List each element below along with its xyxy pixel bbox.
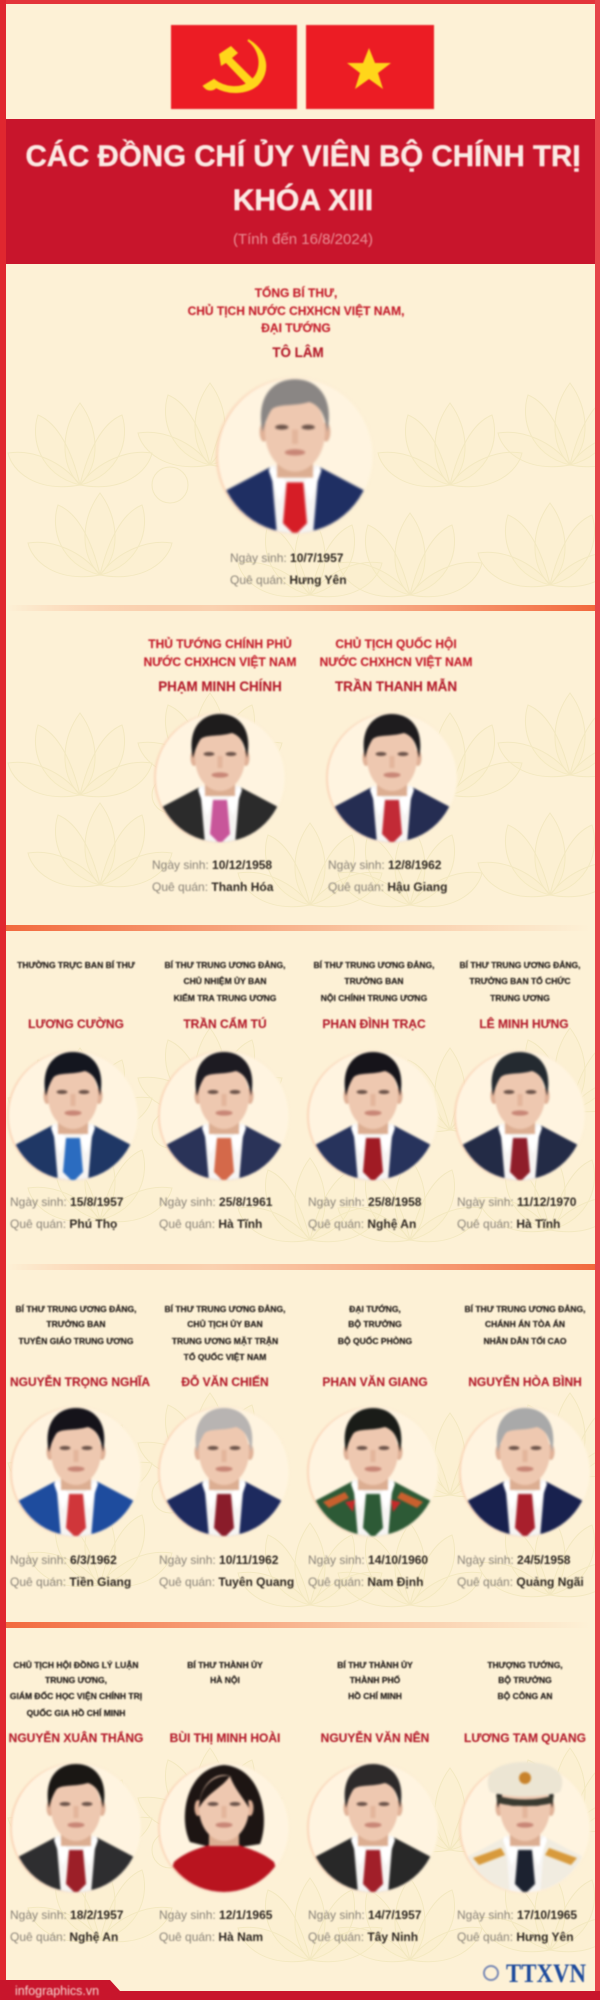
person: Lương Tam Quang: THƯỢNG TƯỚNG, [487,1659,563,1670]
person: Phan Đình Trạc: NỘI CHÍNH TRUNG ƯƠNG [321,992,428,1003]
person: Tô Lâm: TỔNG BÍ THƯ, [255,285,337,300]
person: Phạm Minh Chính: Quê quán: Thanh Hóa [152,880,274,894]
person: Lương Tam Quang: BỘ TRƯỞNG [498,1674,552,1685]
person: Đỗ Văn Chiến: TRUNG ƯƠNG MẶT TRẬN [172,1335,278,1346]
person: Bùi Thị Minh Hoài: HÀ NỘI [210,1674,240,1685]
person: Lê Minh Hưng: Ngày sinh: 11/12/1970 [457,1195,577,1209]
person: Trần Thanh Mẫn: TRẦN THANH MẪN [335,679,457,694]
person: Nguyễn Xuân Thắng: Ngày sinh: 18/2/1957 [10,1908,124,1922]
person: Nguyễn Hòa Bình: NGUYỄN HÒA BÌNH [468,1374,582,1389]
person: Phan Văn Giang: Quê quán: Nam Định [308,1575,423,1589]
person: Lê Minh Hưng: BÍ THƯ TRUNG ƯƠNG ĐẢNG, [460,959,580,970]
person: Phan Văn Giang: Ngày sinh: 14/10/1960 [308,1553,428,1567]
person: Lê Minh Hưng: TRUNG ƯƠNG [490,993,550,1003]
person: Tô Lâm: ĐẠI TƯỚNG [261,320,331,335]
left frame border [0,0,6,2000]
person: Lương Tam Quang: Ngày sinh: 17/10/1965 [457,1908,577,1922]
logo: TTXVN: TTXVN [506,1959,586,1988]
person: Bùi Thị Minh Hoài: BÙI THỊ MINH HOÀI [170,1730,280,1745]
person: Phan Văn Giang: BỘ QUỐC PHÒNG [338,1335,412,1346]
person: Nguyễn Văn Nên [308,1659,438,1944]
divider 1 [6,605,596,611]
person: Lương Cường [8,959,138,1231]
person: Nguyễn Văn Nên: THÀNH PHỐ [350,1674,401,1685]
title band [0,119,600,264]
lotus pattern section 3 [8,1028,600,1242]
person: Phan Văn Giang: PHAN VĂN GIANG [322,1374,428,1389]
person: Trần Thanh Mẫn: Ngày sinh: 12/8/1962 [328,858,442,872]
person: Lê Minh Hưng: LÊ MINH HƯNG [479,1016,569,1031]
person: Phan Đình Trạc: PHAN ĐÌNH TRẠC [322,1016,426,1031]
person: Lê Minh Hưng [455,959,585,1231]
person: Đỗ Văn Chiến: CHỦ TỊCH ỦY BAN [187,1318,263,1329]
divider 4 [0,1622,590,1628]
person: Lương Tam Quang: Quê quán: Hưng Yên [457,1930,574,1944]
person: Trần Cẩm Tú: Ngày sinh: 25/8/1961 [159,1195,273,1209]
footer site label: infographics.vn [15,1984,99,1998]
person: Nguyễn Xuân Thắng [9,1659,143,1944]
person: Phạm Minh Chính [144,636,296,894]
heading [25,139,581,217]
person: Trần Cẩm Tú: Quê quán: Hà Tĩnh [159,1217,262,1231]
divider 2 [0,925,590,931]
person: Nguyễn Hòa Bình: CHÁNH ÁN TÒA ÁN [485,1318,565,1329]
person: Phan Văn Giang [308,1303,438,1589]
person: Đỗ Văn Chiến [159,1303,294,1589]
person: Lương Cường: Ngày sinh: 15/8/1957 [10,1195,124,1209]
divider 3 [6,1264,596,1270]
person: Lương Tam Quang: LƯƠNG TAM QUANG [464,1731,586,1745]
person: Bùi Thị Minh Hoài [159,1659,289,1944]
person: Nguyễn Xuân Thắng: GIÁM ĐỐC HỌC VIỆN CHÍNH TRỊ [10,1690,142,1701]
person: Trần Cẩm Tú [159,959,289,1231]
person: Trần Cẩm Tú: KIỂM TRA TRUNG ƯƠNG [174,992,277,1003]
person: Nguyễn Hòa Bình: Quê quán: Quảng Ngãi [457,1575,584,1589]
person: Nguyễn Xuân Thắng: TRUNG ƯƠNG, [45,1675,107,1685]
person: Trần Cẩm Tú: TRẦN CẨM TÚ [183,1016,267,1031]
heading date note: (Tính đến 16/8/2024) [233,231,373,248]
person: Phan Đình Trạc: BÍ THƯ TRUNG ƯƠNG ĐẢNG, [314,959,434,970]
person: Phan Đình Trạc [308,959,438,1231]
lotus pattern section 5 [8,1748,600,1962]
heading: KHÓA XIII [233,183,373,217]
lotus pattern section 2 [8,693,600,907]
person: Trần Cẩm Tú: BÍ THƯ TRUNG ƯƠNG ĐẢNG, [164,959,286,970]
lotus pattern section 1 [8,383,600,597]
person: Nguyễn Văn Nên: Quê quán: Tây Ninh [308,1930,418,1944]
person: Nguyễn Trọng Nghĩa [10,1303,150,1589]
person: Tô Lâm [188,285,404,587]
person: Nguyễn Xuân Thắng: NGUYỄN XUÂN THẮNG [9,1730,143,1745]
person: Nguyễn Trọng Nghĩa: Quê quán: Tiền Giang [10,1575,131,1589]
flag: party [171,25,297,109]
person: Đỗ Văn Chiến: Quê quán: Tuyên Quang [159,1575,294,1589]
person: Lương Tam Quang: BỘ CÔNG AN [498,1690,552,1701]
person: Phan Văn Giang: ĐẠI TƯỚNG, [349,1303,401,1314]
person: Trần Thanh Mẫn: NƯỚC CHXHCN VIỆT NAM [320,654,472,669]
person: Nguyễn Văn Nên: NGUYỄN VĂN NÊN [321,1730,429,1745]
person: Bùi Thị Minh Hoài: Quê quán: Hà Nam [159,1930,263,1944]
person: Nguyễn Trọng Nghĩa: BÍ THƯ TRUNG ƯƠNG ĐẢNG, [16,1303,136,1314]
person: Đỗ Văn Chiến: ĐỖ VĂN CHIẾN [181,1374,269,1389]
person: Nguyễn Xuân Thắng: Quê quán: Nghệ An [10,1930,118,1944]
person: Nguyễn Trọng Nghĩa: TUYÊN GIÁO TRUNG ƯƠNG [19,1335,134,1346]
person: Phạm Minh Chính: NƯỚC CHXHCN VIỆT NAM [144,654,296,669]
top frame border [0,0,600,4]
person: Tô Lâm: Ngày sinh: 10/7/1957 [230,551,344,565]
person: Phan Văn Giang: BỘ TRƯỞNG [348,1318,402,1329]
person: Nguyễn Trọng Nghĩa: Ngày sinh: 6/3/1962 [10,1553,117,1567]
person: Trần Thanh Mẫn: Quê quán: Hậu Giang [328,880,447,894]
person: Nguyễn Xuân Thắng: CHỦ TỊCH HỘI ĐỒNG LÝ LUẬN [13,1659,139,1670]
person: Nguyễn Hòa Bình: BÍ THƯ TRUNG ƯƠNG ĐẢNG, [464,1303,586,1314]
person: Nguyễn Trọng Nghĩa: NGUYỄN TRỌNG NGHĨA [10,1374,150,1389]
person: Trần Cẩm Tú: CHỦ NHIỆM ỦY BAN [184,975,266,986]
person: Lê Minh Hưng: Quê quán: Hà Tĩnh [457,1217,560,1231]
person: Bùi Thị Minh Hoài: Ngày sinh: 12/1/1965 [159,1908,273,1922]
person: Đỗ Văn Chiến: TỔ QUỐC VIỆT NAM [184,1351,266,1362]
person: Lương Cường: LƯƠNG CƯỜNG [28,1016,124,1031]
person: Nguyễn Văn Nên: BÍ THƯ THÀNH ỦY [337,1659,413,1670]
right frame border [595,0,600,2000]
person: Lương Tam Quang [457,1659,590,1944]
flag: national [306,25,434,109]
person: Tô Lâm: CHỦ TỊCH NƯỚC CHXHCN VIỆT NAM, [188,303,404,318]
person: Lương Cường: THƯỜNG TRỰC BAN BÍ THƯ [17,959,136,970]
person: Phạm Minh Chính: Ngày sinh: 10/12/1958 [152,858,272,872]
person: Nguyễn Trọng Nghĩa: TRƯỞNG BAN [46,1318,106,1329]
person: Nguyễn Văn Nên: Ngày sinh: 14/7/1957 [308,1908,422,1922]
person: Phạm Minh Chính: PHẠM MINH CHÍNH [158,679,282,694]
person: Nguyễn Hòa Bình: NHÂN DÂN TỐI CAO [483,1335,567,1346]
person: Phan Đình Trạc: TRƯỞNG BAN [344,975,404,986]
person: Đỗ Văn Chiến: Ngày sinh: 10/11/1962 [159,1553,279,1567]
person: Trần Thanh Mẫn [320,636,472,894]
person: Tô Lâm: Quê quán: Hưng Yên [230,573,347,587]
person: Trần Thanh Mẫn: CHỦ TỊCH QUỐC HỘI [335,636,457,651]
heading: CÁC ĐỒNG CHÍ ỦY VIÊN BỘ CHÍNH TRỊ [25,139,581,173]
person: Phan Đình Trạc: Ngày sinh: 25/8/1958 [308,1195,422,1209]
person: Đỗ Văn Chiến: BÍ THƯ TRUNG ƯƠNG ĐẢNG, [164,1303,286,1314]
person: Phạm Minh Chính: THỦ TƯỚNG CHÍNH PHỦ [148,636,292,651]
person: Nguyễn Văn Nên: HỒ CHÍ MINH [348,1690,402,1701]
person: Nguyễn Xuân Thắng: QUỐC GIA HỒ CHÍ MINH [27,1707,125,1718]
person: Lê Minh Hưng: TRƯỞNG BAN TỔ CHỨC [469,975,571,986]
person: Bùi Thị Minh Hoài: BÍ THƯ THÀNH ỦY [187,1659,263,1670]
person: Lương Cường: Quê quán: Phú Thọ [10,1217,117,1231]
lotus pattern section 4 [8,1393,600,1607]
footer band [0,1980,600,2000]
person: Phan Đình Trạc: Quê quán: Nghệ An [308,1217,416,1231]
person: Nguyễn Hòa Bình [457,1303,590,1589]
person: Nguyễn Hòa Bình: Ngày sinh: 24/5/1958 [457,1553,571,1567]
person: Tô Lâm: TÔ LÂM [272,345,324,360]
